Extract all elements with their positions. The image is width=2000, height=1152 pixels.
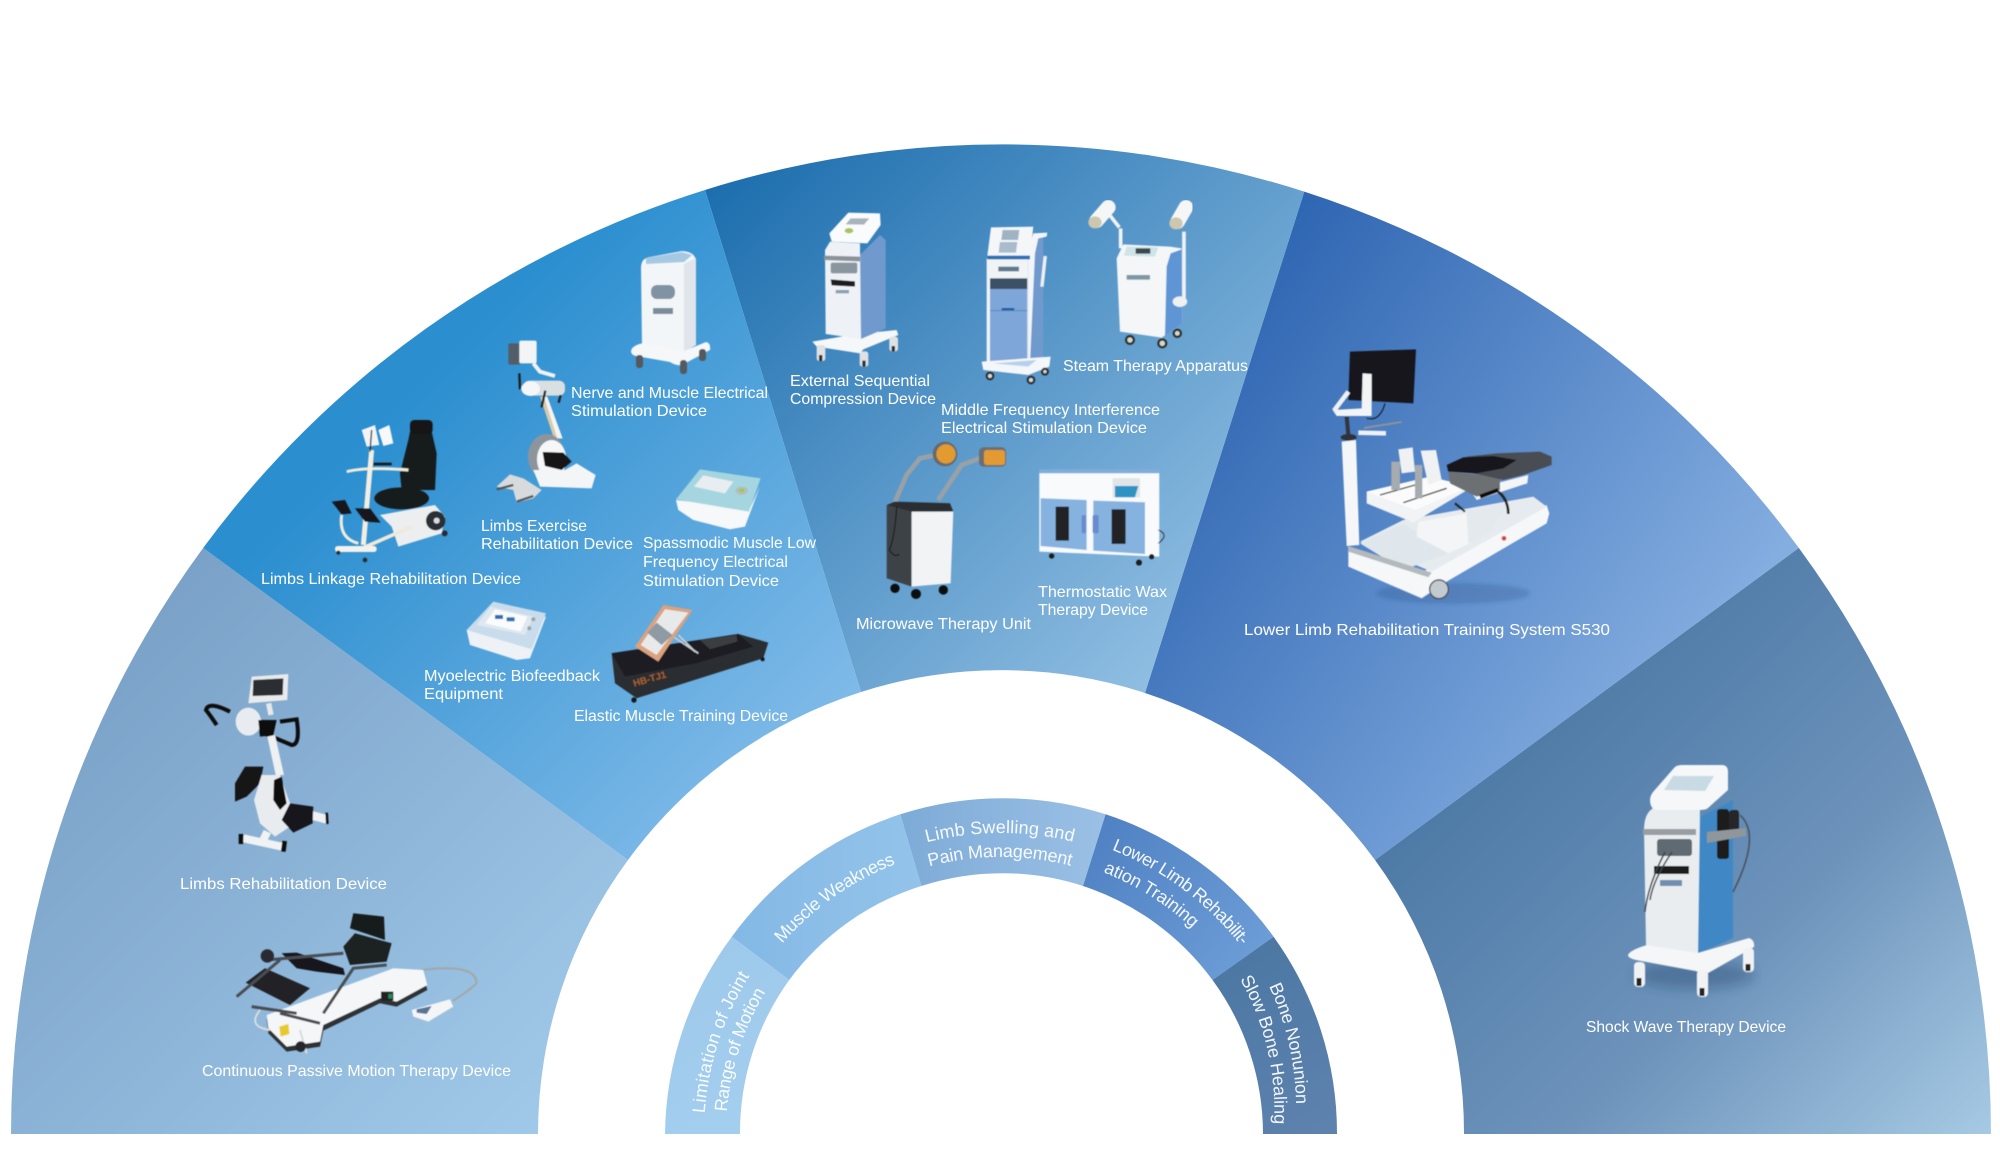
panel: limbs rehabilitation segment xyxy=(11,548,628,1134)
ring segment: limb swelling and pain management: Pain Management xyxy=(928,845,1073,866)
label: limbs exercise rehabilitation device: Limbs Exercise xyxy=(481,518,587,535)
label: limbs linkage rehabilitation device: Limbs Linkage Rehabilitation Device xyxy=(261,571,521,588)
label: limbs rehabilitation device: Limbs Rehabilitation Device xyxy=(180,876,387,893)
label: microwave therapy unit: Microwave Therapy Unit xyxy=(856,616,1032,633)
label: lower limb rehabilitation training system: Lower Limb Rehabilitation Training System S530 xyxy=(1244,622,1610,639)
devices drawn in one zoomed coordinate space xyxy=(332,341,768,703)
label: spasmodic muscle line one: Spassmodic Muscle Low xyxy=(643,535,816,552)
ring segment: limb swelling and pain management xyxy=(900,798,1106,886)
ring segment: limitation of joint range of motion xyxy=(665,936,790,1134)
ring segment: bone nonunion and slow bone healing: Slow Bone Healing xyxy=(1242,976,1288,1124)
label: equipment line: Equipment xyxy=(424,686,504,703)
icon: continuous passive motion device xyxy=(237,913,477,1053)
icon: steam therapy apparatus xyxy=(1088,207,1187,348)
icon: nerve and muscle electrical stimulation device xyxy=(631,251,710,374)
label: compression device line: Compression Device xyxy=(790,391,936,408)
ring segment: lower limb rehabilitation training: Lower Limb Rehabilit- xyxy=(1113,838,1246,943)
panel: electrical stimulation segment xyxy=(203,190,861,860)
icon: limbs rehabilitation device xyxy=(206,674,327,852)
ring segment: lower limb rehabilitation training xyxy=(1083,814,1274,980)
label: stimulation device line: Stimulation Device xyxy=(571,403,707,420)
label: rehabilitation device line: Rehabilitation Device xyxy=(481,536,633,553)
icon: limbs exercise rehabilitation device xyxy=(497,341,596,503)
icon: microwave therapy unit xyxy=(887,442,1006,599)
ring segment: lower limb rehabilitation training: ation Training xyxy=(1104,864,1198,929)
icon: limbs linkage rehabilitation device xyxy=(332,420,448,562)
label: thermostatic wax therapy device: Thermostatic Wax xyxy=(1038,584,1167,601)
icon: middle frequency interference device xyxy=(982,227,1051,384)
label: electrical stimulation device line: Electrical Stimulation Device xyxy=(941,420,1147,437)
icon: thermostatic wax therapy device xyxy=(1039,469,1164,566)
label: nerve and muscle electrical stimulation device: Nerve and Muscle Electrical xyxy=(571,385,768,402)
icon: elastic muscle training device xyxy=(612,605,768,703)
panel: lower limb training segment xyxy=(1145,192,1799,860)
icon: lower limb rehabilitation training system xyxy=(1333,349,1552,603)
icon: myoelectric biofeedback equipment xyxy=(467,602,546,660)
ring segment: muscle weakness xyxy=(732,814,922,980)
ring segment: muscle weakness: Muscle Weakness xyxy=(774,856,894,942)
panel: inner indication ring xyxy=(665,798,1337,1134)
label: middle frequency interference device: Middle Frequency Interference xyxy=(941,402,1160,419)
ring segment: limitation of joint range of motion: Range of Motion xyxy=(714,989,765,1110)
panel: shock wave segment xyxy=(1375,548,1991,1134)
icon: shock wave therapy device xyxy=(1628,765,1755,997)
label: continuous passive motion device: Continuous Passive Motion Therapy Device xyxy=(202,1063,511,1080)
label: steam therapy apparatus: Steam Therapy Apparatus xyxy=(1063,358,1248,375)
ring segment: bone nonunion and slow bone healing: Bone Nonunion xyxy=(1270,982,1308,1103)
label: elastic muscle training device: Elastic Muscle Training Device xyxy=(574,708,788,725)
panel: physiotherapy segment xyxy=(705,144,1304,693)
label: shock wave therapy device: Shock Wave Therapy Device xyxy=(1586,1019,1786,1036)
label: myoelectric biofeedback: Myoelectric Biofeedback xyxy=(424,668,601,685)
label: therapy device line: Therapy Device xyxy=(1038,602,1148,619)
icon: external sequential compression device xyxy=(812,213,898,367)
label: spasmodic muscle line three: Stimulation Device xyxy=(643,573,779,590)
label: spasmodic muscle line two: Frequency Electrical xyxy=(643,554,788,571)
ring segment: limb swelling and pain management: Limb Swelling and xyxy=(925,820,1075,842)
icon: elastic muscle training device: HB-TJ1 xyxy=(632,669,668,690)
icon: spasmodic muscle device xyxy=(676,469,761,529)
label: external sequential compression device: External Sequential xyxy=(790,373,930,390)
ring segment: bone nonunion and slow bone healing xyxy=(1212,936,1337,1134)
ring segment: limitation of joint range of motion: Limitation of Joint xyxy=(692,971,750,1112)
